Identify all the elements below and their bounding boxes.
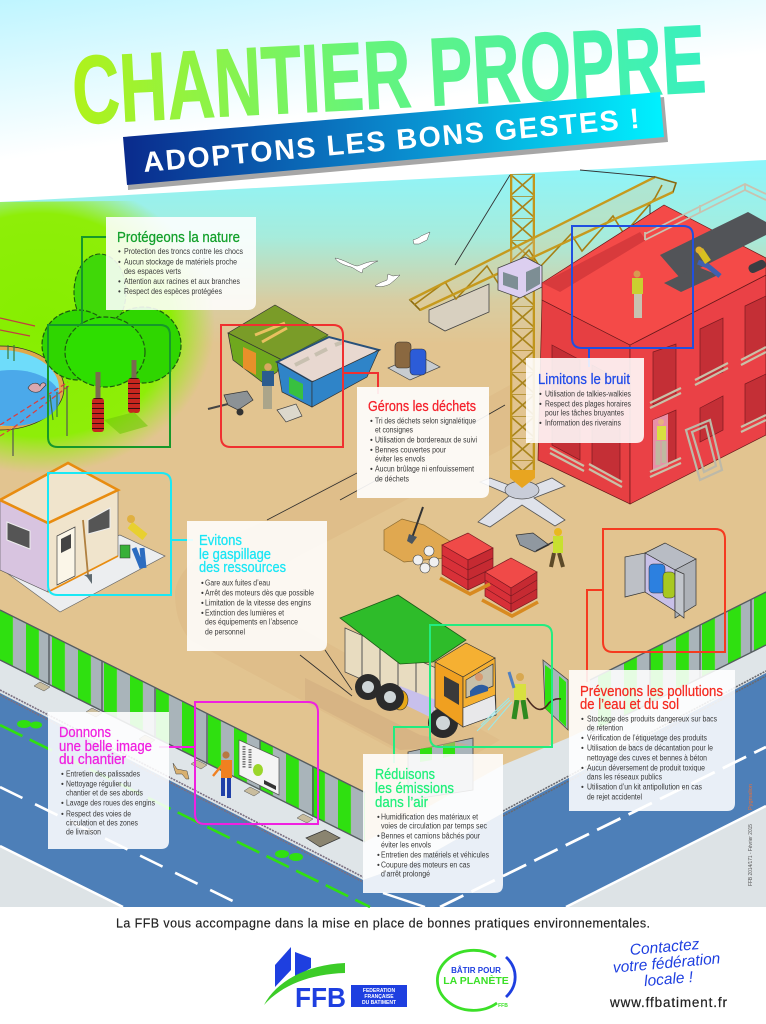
frame: emissions xyxy=(394,625,552,763)
wheelbarrow xyxy=(208,391,253,416)
callout: resources: • xyxy=(201,588,204,598)
callout: image: chantier et de ses abords xyxy=(66,788,143,798)
callout: emissions: éviter les envols xyxy=(381,840,431,850)
callout: resources xyxy=(48,473,327,651)
callout: emissions: dans l’air xyxy=(375,795,428,811)
print credits xyxy=(748,784,754,886)
logo: Bâtir pour la planète: BÂTIR POUR xyxy=(451,966,501,975)
callout: noise: pour les tâches bruyantes xyxy=(545,408,624,418)
callout: resources: Gare aux fuites d’eau xyxy=(205,578,270,588)
callout: emissions: Réduisons xyxy=(375,767,435,783)
chemical cabinet xyxy=(625,543,696,618)
contact text xyxy=(612,936,721,990)
callout: image: circulation et des zones xyxy=(66,818,138,828)
callout: emissions: Entretien des matériels et véhicules xyxy=(381,850,489,860)
callout: image: Entretien des palissades xyxy=(66,770,140,778)
callout: waste: Utilisation de bordereaux de suivi xyxy=(375,436,477,444)
callout: noise: Information des riverains xyxy=(545,418,621,428)
callout: pollution: Vérification de l’étiquetage des produits xyxy=(587,734,707,742)
callout: pollution: • xyxy=(581,782,584,792)
callout: emissions: Bennes et camions bâchés pour xyxy=(381,832,480,840)
callout: pollution: de l’eau et du sol xyxy=(580,697,679,713)
worker wheelbarrow xyxy=(516,528,563,567)
callout: waste: • xyxy=(370,464,373,474)
callout: image xyxy=(48,702,318,849)
callout: emissions: • xyxy=(377,812,380,822)
callout: nature: • xyxy=(118,287,121,296)
callout: resources: Limitation de la vitesse des engins xyxy=(205,598,311,608)
callout: waste: • xyxy=(370,436,373,444)
callout: resources: • xyxy=(201,608,204,618)
callout: noise: • xyxy=(539,390,542,398)
callout: image: • xyxy=(61,770,64,778)
left curb xyxy=(0,690,363,882)
callout: waste: • xyxy=(370,446,373,454)
callout: image: de livraison xyxy=(66,828,101,836)
callout: nature: Respect des espèces protégées xyxy=(124,287,222,296)
callout: emissions: Coupure des moteurs en cas xyxy=(381,860,470,870)
callout: waste: Tri des déchets selon signalétique xyxy=(375,416,476,426)
website: www.ffbatiment.fr xyxy=(609,995,728,1010)
callout: pollution: • xyxy=(581,764,584,772)
cab xyxy=(498,257,542,298)
worker waste xyxy=(262,363,274,409)
fence right xyxy=(590,592,766,733)
callout: pollution: Aucun déversement de produit toxique xyxy=(587,764,705,772)
callout: image: Donnons xyxy=(59,725,111,741)
banner: ADOPTONS LES BONS GESTES ! xyxy=(142,103,641,179)
callout: emissions: • xyxy=(377,832,380,840)
bike pictograms xyxy=(17,720,303,861)
callout: waste: Gérons les déchets xyxy=(368,399,476,415)
callout: resources: de personnel xyxy=(205,628,245,636)
door frames xyxy=(686,420,722,480)
callout: pollution: Stockage des produits dangereux sur bacs xyxy=(587,714,717,724)
callout: emissions: voies de circulation par temps sec xyxy=(381,822,487,830)
frame: image xyxy=(159,702,318,824)
trees xyxy=(42,254,181,434)
contact text: locale ! xyxy=(643,969,694,990)
gate panel right xyxy=(543,660,568,730)
top background xyxy=(0,0,766,215)
logo: FFB: FRANÇAISE xyxy=(364,994,394,1000)
callout: emissions: les émissions xyxy=(375,781,454,797)
callout: noise: • xyxy=(539,400,542,408)
road centre dashes xyxy=(0,787,245,907)
truck xyxy=(305,595,496,750)
right road dashes xyxy=(440,747,766,907)
callout: waste: • xyxy=(370,416,373,426)
roof membrane xyxy=(660,212,766,278)
manhole xyxy=(306,830,340,847)
roof worker xyxy=(632,270,643,318)
callout: pollution: Prévenons les pollutions xyxy=(580,684,723,700)
callout: nature: des espaces verts xyxy=(124,267,181,276)
callout: waste: de déchets xyxy=(375,474,409,484)
callout: pollution: de rétention xyxy=(587,724,623,732)
callout: noise: Respect des plages horaires xyxy=(545,400,631,408)
callout: image: Nettoyage régulier du xyxy=(66,780,131,788)
lower right pavement xyxy=(566,807,766,907)
callout: waste: Aucun brûlage ni enfouissement xyxy=(375,464,475,474)
jib xyxy=(410,177,676,310)
footer sentence: La FFB vous accompagne dans la mise en place de bonnes pratiques environnementales. xyxy=(116,916,650,930)
callout: image: Respect des voies de xyxy=(66,810,131,818)
callout: pollution xyxy=(569,529,735,811)
logo: FFB: FEDERATION xyxy=(363,988,395,994)
callout: resources: Extinction des lumières et xyxy=(205,608,285,618)
base xyxy=(478,478,565,527)
lower left pavement xyxy=(0,847,123,907)
callout: waste: Bennes couvertes pour xyxy=(375,446,446,454)
logo: Bâtir pour la planète: FFB xyxy=(498,1003,508,1009)
callout: waste: éviter les envols xyxy=(375,454,425,464)
frame: resources xyxy=(48,473,193,595)
waste skip green xyxy=(228,305,328,382)
callout: noise: • xyxy=(539,418,542,428)
site notice and visitor xyxy=(173,740,279,798)
worker hosing xyxy=(477,672,561,731)
logo: FFB: FFB xyxy=(295,982,346,1013)
callout: image: une belle image xyxy=(59,739,152,755)
callout: pollution: Utilisation de bacs de décantation pour le xyxy=(587,744,713,752)
road edges xyxy=(0,806,766,907)
callout: noise xyxy=(526,226,693,443)
worker washing xyxy=(120,515,145,568)
sand tracks xyxy=(175,385,510,775)
callout: nature xyxy=(48,217,256,447)
callout: nature: Protection des troncs contre les chocs xyxy=(124,247,243,256)
callout: image: • xyxy=(61,798,64,808)
callout: pollution: • xyxy=(581,714,584,724)
callout: resources: des ressources xyxy=(199,560,286,576)
callout: image: • xyxy=(61,780,64,788)
debris xyxy=(277,404,302,422)
callout: pollution: • xyxy=(581,744,584,752)
gate panel left xyxy=(408,738,473,800)
callout: nature: Aucun stockage de matériels proche xyxy=(124,258,237,266)
print credits: FFB 2014/171 - Février 2015 xyxy=(748,824,754,886)
callout: pollution: Utilisation d’un kit antipollution en cas xyxy=(587,782,702,792)
roof railing xyxy=(645,184,766,240)
callout: image: • xyxy=(61,810,64,818)
brick pallets xyxy=(440,533,538,616)
callout: emissions: • xyxy=(377,850,380,860)
contact text: Contactez xyxy=(629,936,700,959)
callout: nature: Protégeons la nature xyxy=(117,230,240,246)
callout: nature: • xyxy=(118,247,121,256)
right curb xyxy=(503,671,766,816)
fence left xyxy=(0,610,365,842)
pond xyxy=(0,318,70,456)
callout: pollution: nettoyage des cuves et bennes à béton xyxy=(587,754,707,762)
callout: emissions: d’arrêt prolongé xyxy=(381,870,430,878)
windows xyxy=(552,296,766,480)
window man xyxy=(653,414,668,472)
callout: resources: Arrêt des moteurs dès que possible xyxy=(205,588,314,598)
callout: waste xyxy=(221,325,489,498)
callout: resources: des équipements en l’absence xyxy=(205,618,298,626)
sand pile xyxy=(384,507,464,562)
print credits: Pygmalion xyxy=(748,784,754,810)
callout: noise: Limitons le bruit xyxy=(538,372,630,388)
callout: pollution: dans les réseaux publics xyxy=(587,772,662,782)
callout: nature: • xyxy=(118,258,121,266)
bike lane markings xyxy=(0,725,370,907)
contact text: votre fédération xyxy=(612,950,721,977)
site scene xyxy=(0,160,766,907)
logo: Bâtir pour la planète xyxy=(437,950,515,1010)
left sidewalk xyxy=(0,645,766,880)
kneeling worker xyxy=(696,246,766,276)
callout: emissions: • xyxy=(377,860,380,870)
building xyxy=(538,184,766,504)
balcony bars xyxy=(550,347,766,487)
waste skip blue xyxy=(277,337,379,407)
callout: resources: • xyxy=(201,598,204,608)
callout: pollution: de rejet accidentel xyxy=(587,792,642,802)
callout: image: Lavage des roues des engins xyxy=(66,798,155,808)
counterweight xyxy=(429,284,489,331)
logo: Bâtir pour la planète: LA PLANÈTE xyxy=(443,974,509,987)
logo: FFB xyxy=(264,947,407,1013)
logo: FFB: DU BATIMENT xyxy=(362,1000,396,1006)
frame: pollution xyxy=(587,529,725,682)
callout: waste: et consignes xyxy=(375,426,413,434)
callout: emissions: Humidification des matériaux et xyxy=(381,812,479,822)
buckets xyxy=(413,546,439,573)
callout: image: du chantier xyxy=(59,752,126,768)
frame: noise xyxy=(572,226,693,367)
callout: resources: le gaspillage xyxy=(199,547,271,563)
callout: nature: • xyxy=(118,277,121,286)
birds xyxy=(335,232,430,287)
site hut xyxy=(0,463,165,612)
left road xyxy=(0,673,766,907)
callout: noise: Utilisation de talkies-walkies xyxy=(545,390,631,398)
crane xyxy=(410,170,676,527)
callout: nature: Attention aux racines et aux branches xyxy=(124,277,240,286)
callout: emissions xyxy=(363,625,552,893)
callout: resources: • xyxy=(201,578,204,588)
frame: nature xyxy=(48,237,170,447)
frame: waste xyxy=(221,325,378,447)
callout: pollution: • xyxy=(581,734,584,742)
drums on pallet xyxy=(388,342,440,380)
callout: resources: Evitons xyxy=(199,533,242,549)
